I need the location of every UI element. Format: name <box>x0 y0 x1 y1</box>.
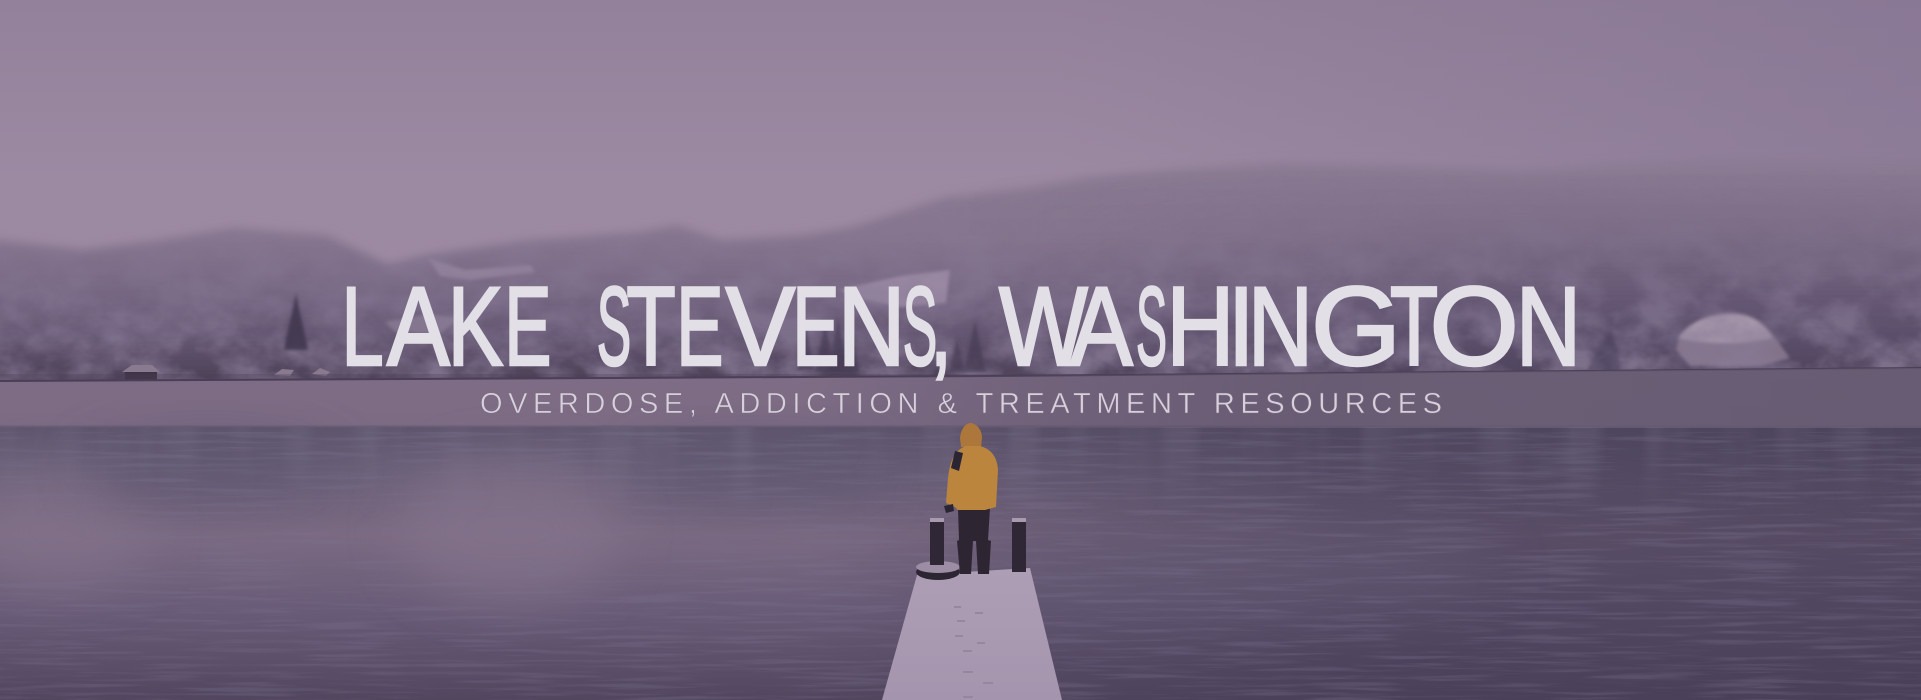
title: N <box>838 264 905 389</box>
snow field on hillside <box>840 270 950 307</box>
person in orange jacket <box>944 423 998 574</box>
title: W <box>999 264 1088 389</box>
title: E <box>792 264 839 389</box>
title: S <box>903 264 937 389</box>
right mooring post <box>1012 518 1026 572</box>
title: H <box>1166 264 1234 389</box>
title: , <box>930 264 952 389</box>
dock footprints <box>954 606 993 698</box>
title: T <box>626 264 676 389</box>
title: N <box>1248 264 1313 389</box>
title: L <box>342 264 384 389</box>
dark conifers <box>284 293 1620 372</box>
lakeside cabins <box>0 365 1921 382</box>
left mooring post <box>916 518 960 580</box>
title: K <box>448 264 503 389</box>
title: S <box>1136 264 1167 389</box>
wooded hillside silhouette <box>0 164 1921 380</box>
title: G <box>1311 264 1401 389</box>
title: A <box>387 264 450 389</box>
title: N <box>1516 264 1581 389</box>
title: O <box>1430 264 1519 389</box>
sky background <box>0 0 1921 400</box>
subtitle: OVERDOSE, ADDICTION & TREATMENT RESOURCES <box>480 388 1442 420</box>
title: I <box>1228 264 1254 389</box>
lake water <box>0 368 1921 700</box>
title: S <box>597 264 631 389</box>
snow field and houses at left <box>385 258 535 334</box>
snowy dock <box>882 568 1062 700</box>
title: E <box>504 264 551 389</box>
title: T <box>1390 264 1438 389</box>
title: E <box>676 264 723 389</box>
title: A <box>1070 264 1133 389</box>
foliage texture <box>0 259 1921 380</box>
title: V <box>726 264 795 389</box>
snowy mound on right shore <box>1676 313 1790 366</box>
